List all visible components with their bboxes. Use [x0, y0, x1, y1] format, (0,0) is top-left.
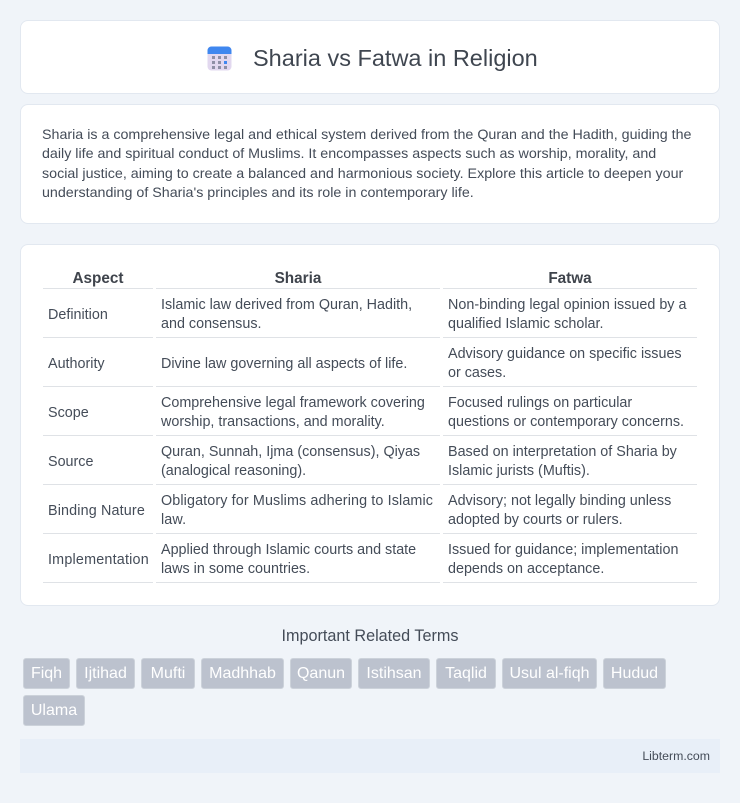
- column heading: Fatwa: Fatwa: [548, 270, 592, 287]
- Binding Nature: Fatwa: Advisory; not legally binding unless: [448, 493, 671, 509]
- tag: Qanun: [290, 658, 352, 689]
- Binding Nature: Fatwa: adopted by courts or rulers.: [448, 512, 623, 528]
- column heading: Aspect: Aspect: [72, 270, 124, 287]
- heading: related terms: Important Related Terms: [282, 627, 458, 645]
- row: Scope: Scope: [48, 405, 89, 421]
- Authority: Fatwa: or cases.: [448, 365, 506, 381]
- tag: Ulama: Ulama: [31, 702, 77, 719]
- intro text: understanding of Sharia's principles and its role in contemporary life.: [42, 185, 474, 201]
- tag: Fiqh: Fiqh: [31, 665, 62, 682]
- header panel: [20, 20, 720, 94]
- icon: calendar: [208, 46, 232, 70]
- Scope: Sharia: [161, 395, 425, 430]
- column heading: Sharia: Sharia: [275, 270, 321, 287]
- row: Implementation: Implementation: [48, 552, 149, 568]
- Authority: Fatwa: Advisory guidance on specific issues: [448, 346, 682, 362]
- tag: Fiqh: [23, 658, 70, 689]
- Implementation: Fatwa: Issued for guidance; implementation: [448, 542, 678, 558]
- Binding Nature: Sharia: Obligatory for Muslims adhering to Islamic: [161, 493, 433, 509]
- Binding Nature: Sharia: law.: [161, 512, 186, 528]
- tag: Mufti: [141, 658, 195, 689]
- Implementation: Fatwa: depends on acceptance.: [448, 561, 604, 577]
- tag: Ijtihad: [76, 658, 135, 689]
- row: Source: Source: [48, 454, 93, 470]
- tag: Mufti: Mufti: [151, 665, 185, 682]
- Source: Fatwa: Islamic jurists (Muftis).: [448, 463, 590, 479]
- tag: Ijtihad: Ijtihad: [84, 665, 127, 682]
- tag: Ulama: [23, 695, 85, 726]
- tag: Hudud: Hudud: [611, 665, 658, 682]
- tag: Hudud: [603, 658, 666, 689]
- Definition: Sharia: and consensus.: [161, 316, 261, 332]
- Implementation: Sharia: Applied through Islamic courts and state: [161, 542, 416, 558]
- row: Definition: Definition: [48, 307, 108, 323]
- Source: Fatwa: [448, 444, 677, 479]
- Implementation: Fatwa: [448, 542, 678, 577]
- tag: Istihsan: Istihsan: [366, 665, 422, 682]
- Definition: Fatwa: qualified Islamic scholar.: [448, 316, 603, 332]
- Scope: Sharia: worship, transactions, and morality.: [161, 414, 385, 430]
- row: Authority: Authority: [48, 356, 105, 372]
- tag: Usul al-fiqh: Usul al-fiqh: [509, 665, 590, 682]
- tag: Istihsan: [358, 658, 430, 689]
- Scope: Fatwa: [448, 395, 684, 430]
- Scope: Sharia: Comprehensive legal framework covering: [161, 395, 425, 411]
- tag: Taqlid: Taqlid: [445, 665, 487, 682]
- Binding Nature: Sharia: [161, 493, 433, 528]
- footer bar: [20, 739, 720, 773]
- Source: Sharia: Quran, Sunnah, Ijma (consensus), Qiyas: [161, 444, 420, 460]
- intro text: daily life and spiritual conduct of Muslims. It encompasses aspects such as worship, morality, and: [42, 146, 656, 162]
- tag: Taqlid: [436, 658, 496, 689]
- intro text: [42, 127, 691, 201]
- Source: Sharia: [161, 444, 420, 479]
- Source: Sharia: (analogical reasoning).: [161, 463, 306, 479]
- panel: comparison table: [20, 244, 720, 606]
- footer credit: Libterm.com: [642, 749, 710, 763]
- Implementation: Sharia: [161, 542, 416, 577]
- Definition: Sharia: Islamic law derived from Quran, Hadith,: [161, 297, 412, 313]
- tag: Madhhab: Madhhab: [209, 665, 276, 682]
- Authority: Fatwa: [448, 346, 682, 381]
- Scope: Fatwa: questions or contemporary concerns.: [448, 414, 684, 430]
- Implementation: Sharia: laws in some countries.: [161, 561, 310, 577]
- Definition: Sharia: [161, 297, 412, 332]
- tag: Qanun: Qanun: [297, 665, 345, 682]
- row: Binding Nature: Binding Nature: [48, 503, 145, 519]
- title: Sharia vs Fatwa in Religion: [253, 45, 538, 71]
- Scope: Fatwa: Focused rulings on particular: [448, 395, 632, 411]
- tag: Madhhab: [201, 658, 284, 689]
- tag: Usul al-fiqh: [502, 658, 597, 689]
- Definition: Fatwa: Non-binding legal opinion issued by a: [448, 297, 686, 313]
- Authority: Sharia: Divine law governing all aspects of life.: [161, 356, 407, 372]
- Source: Fatwa: Based on interpretation of Sharia by: [448, 444, 677, 460]
- Binding Nature: Fatwa: [448, 493, 671, 528]
- intro text: social justice, aiming to create a balanced and harmonious society. Explore this article to deepen your: [42, 166, 683, 182]
- intro panel: [20, 104, 720, 224]
- Definition: Fatwa: [448, 297, 686, 332]
- intro text: Sharia is a comprehensive legal and ethical system derived from the Quran and the Hadith, guiding the: [42, 127, 691, 143]
